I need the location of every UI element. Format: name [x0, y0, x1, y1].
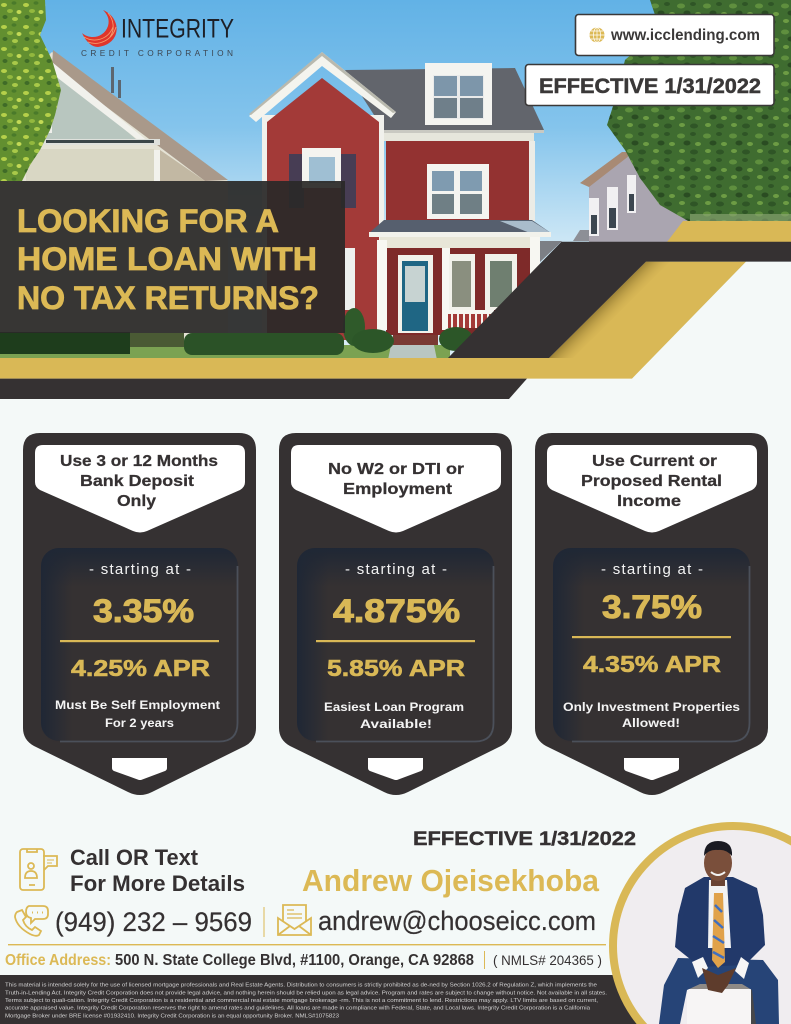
rate panel [41, 548, 238, 742]
rate panel: - starting at - [345, 561, 447, 578]
icon: phone with contact and chat [20, 849, 57, 890]
effective date heading: EFFECTIVE 1/31/2022 [413, 828, 636, 850]
contact divider [264, 907, 265, 937]
white page area below the bands [505, 262, 791, 400]
card header: Employment [343, 481, 452, 498]
office address line: Office Address: [5, 952, 111, 969]
icon: phone with speech bubble [15, 906, 48, 936]
card header: No W2 or DTI or [328, 461, 464, 478]
address divider rule [8, 944, 606, 945]
agent portrait in gold ring [613, 826, 791, 1024]
card header [547, 445, 757, 532]
office address line: 500 N. State College Blvd, #1100, Orange, CA 92868 [115, 952, 474, 969]
rate panel: - starting at - [601, 561, 703, 578]
rate panel: Available! [360, 717, 432, 731]
porch roof [369, 220, 551, 248]
icon: globe [590, 28, 604, 42]
footer disclaimer bar: accurate appraised value. Integrity Credit Corporation reserves the right to amend rates and guidelines. All loans are made in compliance with Federal, State, and Local laws. Integrity Credit Corporation is a California [5, 1006, 591, 1012]
lawn and shrubs [0, 308, 473, 361]
headline: NO TAX RETURNS? [17, 280, 319, 316]
card header: Income [617, 493, 681, 510]
left neighbouring house [0, 50, 228, 340]
website badge: www.icclending.com [610, 27, 760, 44]
agent name: Andrew Ojeisekhoba [302, 863, 600, 898]
main red house [249, 52, 551, 340]
footer disclaimer bar [0, 975, 650, 1024]
gold ring [613, 826, 791, 1024]
call or text prompt: For More Details [70, 871, 245, 896]
card bottom tab [624, 758, 679, 780]
ground floor side window [345, 248, 355, 310]
website badge [576, 14, 774, 56]
email address: andrew@chooseicc.com [318, 906, 596, 936]
card header: Only [117, 493, 156, 510]
rate panel: Easiest Loan Program [324, 700, 464, 714]
card body [535, 433, 768, 795]
effective date badge [526, 64, 774, 106]
headline [17, 203, 319, 316]
rate panel: Only Investment Properties [563, 700, 740, 714]
card body [23, 433, 256, 795]
icon: red crescent [82, 10, 117, 47]
right tree [607, 0, 791, 222]
second floor window [427, 164, 489, 219]
rate panel: 4.875% [333, 593, 460, 629]
rate panel: - starting at - [89, 561, 191, 578]
porch wall [386, 247, 532, 335]
call or text prompt [70, 845, 245, 896]
dormer window [425, 63, 492, 125]
logo: Integrity Credit Corporation: CREDIT CORPORATION [81, 48, 233, 58]
headline: LOOKING FOR A [17, 203, 279, 239]
rate panel: Must Be Self Employment [55, 698, 220, 712]
head [704, 841, 732, 886]
card header: Use 3 or 12 Months [60, 453, 218, 470]
card body [279, 433, 512, 795]
logo: Integrity Credit Corporation: INTEGRITY [121, 14, 234, 44]
upper window with shutters [289, 148, 356, 208]
gold and dark angled bands [0, 221, 791, 399]
front door [398, 255, 433, 333]
cuffs and hands [692, 957, 749, 993]
tie [712, 893, 725, 968]
card: rental income program [535, 433, 768, 795]
footer disclaimer bar: Terms subject to quali-cation. Integrity Credit Corporation is a residential and commercial real estate mortgage brokerage -rm. This is not a commitment to lend. Restrictions may apply. LTV limits are based on current, [5, 998, 598, 1004]
rate panel [297, 548, 494, 742]
card header [35, 445, 245, 532]
overlay panel with headline [0, 181, 345, 333]
card header [291, 445, 501, 532]
phone number: (949) 232 – 9569 [55, 907, 252, 937]
card: bank deposit program [23, 433, 256, 795]
rate panel: 3.35% [93, 593, 194, 629]
hero photo: houses and trees [0, 0, 791, 362]
rate panel: 4.25% APR [71, 655, 210, 681]
headline: HOME LOAN WITH [17, 241, 317, 277]
card header: Bank Deposit [80, 473, 194, 490]
office address line [5, 951, 602, 969]
right neighbouring house [540, 152, 690, 262]
shirt [708, 880, 731, 948]
card bottom tab [368, 758, 423, 780]
effective date badge: EFFECTIVE 1/31/2022 [539, 75, 761, 98]
card header: Proposed Rental [581, 473, 722, 490]
card header: Use Current or [592, 453, 717, 470]
seat block [687, 984, 756, 1024]
rate panel: Allowed! [622, 716, 680, 730]
porch railing [448, 310, 494, 328]
jacket [675, 877, 765, 967]
logo: Integrity Credit Corporation [81, 10, 234, 58]
footer disclaimer bar: Mortgage Broker under BRE license #01932410. Integrity Credit Corporation is an equal opportunity Broker. NMLS#1075823 [5, 1013, 339, 1019]
porch windows [449, 254, 517, 310]
footer disclaimer bar: This material is intended solely for the use of licensed mortgage professionals and Real Estate Agents. Distribution to consumers is strictly prohibited as de-ned by Section 1026.2 of Regulation Z, which implements the [5, 982, 597, 988]
office address line: ( NMLS# 204365 ) [493, 952, 602, 968]
left tree [0, 0, 61, 181]
rate panel: 3.75% [602, 589, 702, 625]
card: no W2 program [279, 433, 512, 795]
call or text prompt: Call OR Text [70, 845, 199, 870]
porch columns [377, 240, 387, 330]
rate panel: For 2 years [105, 716, 174, 730]
footer disclaimer bar: Truth-in-Lending Act. Integrity Credit Corporation does not provide legal advice, and nothing herein should be relied upon as legal advice. Program and rates are subject to change without notice. Not available in all states. [5, 990, 607, 996]
icon: envelope with letter [278, 905, 311, 935]
card bottom tab [112, 758, 167, 780]
rate panel: 5.85% APR [327, 655, 465, 681]
legs [659, 958, 779, 1024]
rate panel [553, 548, 750, 742]
rate panel: 4.35% APR [583, 651, 721, 677]
